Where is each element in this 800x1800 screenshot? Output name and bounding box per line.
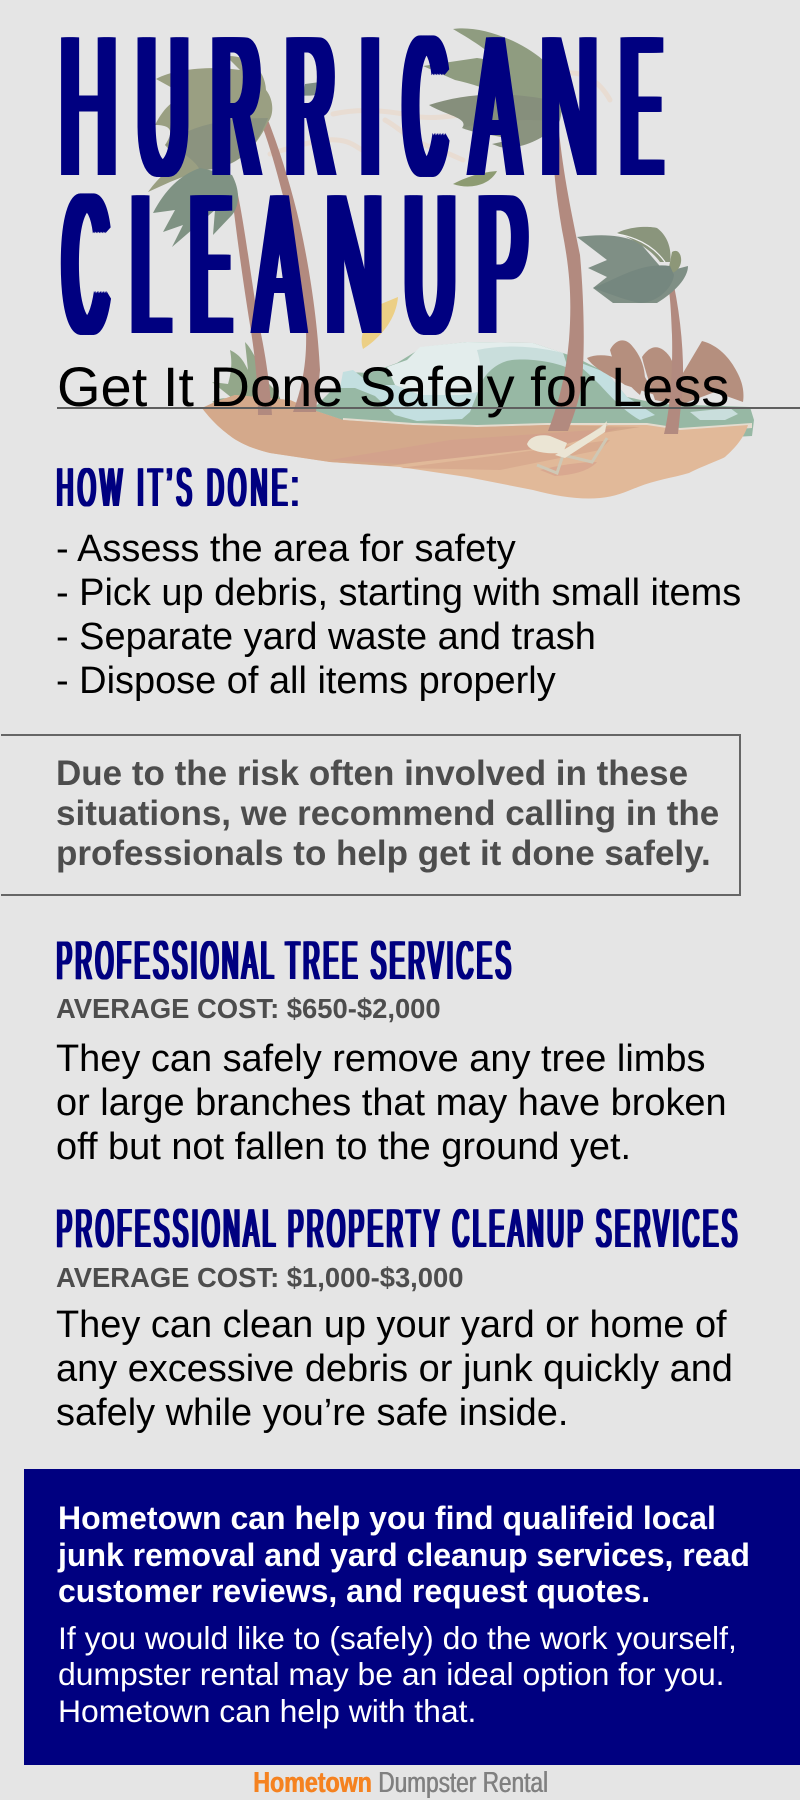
heading: how it's done: HOW IT’S DONE: xyxy=(55,456,301,518)
title line 1: C xyxy=(405,0,445,218)
callout: recommendation box xyxy=(1,734,741,896)
sandy beach xyxy=(202,395,748,499)
title line 2 xyxy=(60,153,529,376)
how it's done list: - Separate yard waste and trash xyxy=(56,616,596,658)
title line 1: A xyxy=(472,0,518,218)
title line 1: U xyxy=(138,0,188,218)
title line 2: E xyxy=(192,153,229,376)
call to action bold text xyxy=(58,1500,750,1609)
illustration: palm trees and beach in a storm xyxy=(148,28,754,498)
title line 1 xyxy=(60,0,664,218)
tree services description: They can safely remove any tree limbs xyxy=(56,1038,705,1080)
call to action body text: dumpster rental may be an ideal option for you. xyxy=(58,1656,725,1692)
property cleanup description: safely while you’re safe inside. xyxy=(56,1392,568,1434)
left shrub xyxy=(212,342,281,414)
title line 2: C xyxy=(64,153,107,376)
call to action bold text: Hometown can help you find qualifeid local xyxy=(58,1500,716,1536)
tree services cost: AVERAGE COST: $650-$2,000 xyxy=(56,993,441,1024)
palm crown left olive xyxy=(148,56,320,247)
palm crown centre xyxy=(423,28,562,186)
property cleanup description: They can clean up your yard or home of xyxy=(56,1304,727,1346)
heading: professional property cleanup services: PROFESSIONAL PROPERTY CLEANUP SERVICES xyxy=(55,1198,739,1259)
title line 1: R xyxy=(287,0,334,218)
call to action body text: If you would like to (safely) do the work yourself, xyxy=(58,1620,737,1656)
property cleanup description: any excessive debris or junk quickly and xyxy=(56,1348,733,1390)
callout text xyxy=(56,754,719,873)
tree services description xyxy=(56,1038,727,1168)
panel: call to action xyxy=(24,1469,800,1765)
title line 1: R xyxy=(213,0,260,218)
beach lounge chair xyxy=(527,421,607,473)
heading: professional tree services: PROFESSIONAL TREE SERVICES xyxy=(55,930,513,991)
how it's done list: - Dispose of all items properly xyxy=(56,660,556,702)
callout text: Due to the risk often involved in these xyxy=(56,754,688,793)
title: hurricane cleanup xyxy=(60,0,664,376)
breaking wave xyxy=(310,342,754,440)
title line 2: U xyxy=(405,153,455,376)
title line 1: N xyxy=(541,0,598,218)
title line 2: N xyxy=(326,153,383,376)
title line 1: E xyxy=(622,0,660,218)
title line 2: A xyxy=(256,153,302,376)
callout text: situations, we recommend calling in the xyxy=(56,794,719,833)
coastal rocks xyxy=(587,340,743,405)
tree services description: off but not fallen to the ground yet. xyxy=(56,1126,631,1168)
tree services description: or large branches that may have broken xyxy=(56,1082,727,1124)
palm crown right xyxy=(577,227,688,303)
how it's done list: - Assess the area for safety xyxy=(56,528,516,570)
flying surfboard xyxy=(362,297,398,349)
call to action bold text: junk removal and yard cleanup services, read xyxy=(58,1537,750,1573)
callout text: professionals to help get it done safely. xyxy=(56,834,711,873)
palm tree trunks xyxy=(231,115,683,434)
how it's done list xyxy=(56,528,741,702)
title line 1: H xyxy=(60,0,117,218)
logo words: dumpster rental: Dumpster Rental xyxy=(378,1767,548,1799)
call to action body text: Hometown can help with that. xyxy=(58,1693,476,1729)
subtitle: Get It Done Safely for Less xyxy=(57,355,729,418)
property cleanup cost: AVERAGE COST: $1,000-$3,000 xyxy=(56,1262,464,1293)
how it's done list: - Pick up debris, starting with small items xyxy=(56,572,741,614)
call to action body text xyxy=(58,1620,737,1729)
title line 2: L xyxy=(132,153,169,376)
footer logo xyxy=(253,1767,548,1799)
wind swirls xyxy=(270,73,610,160)
logo word: hometown: Hometown xyxy=(253,1767,372,1799)
property cleanup description xyxy=(56,1304,733,1434)
call to action bold text: customer reviews, and request quotes. xyxy=(58,1573,650,1609)
title line 2: P xyxy=(478,153,527,376)
title line 1: I xyxy=(360,0,380,218)
